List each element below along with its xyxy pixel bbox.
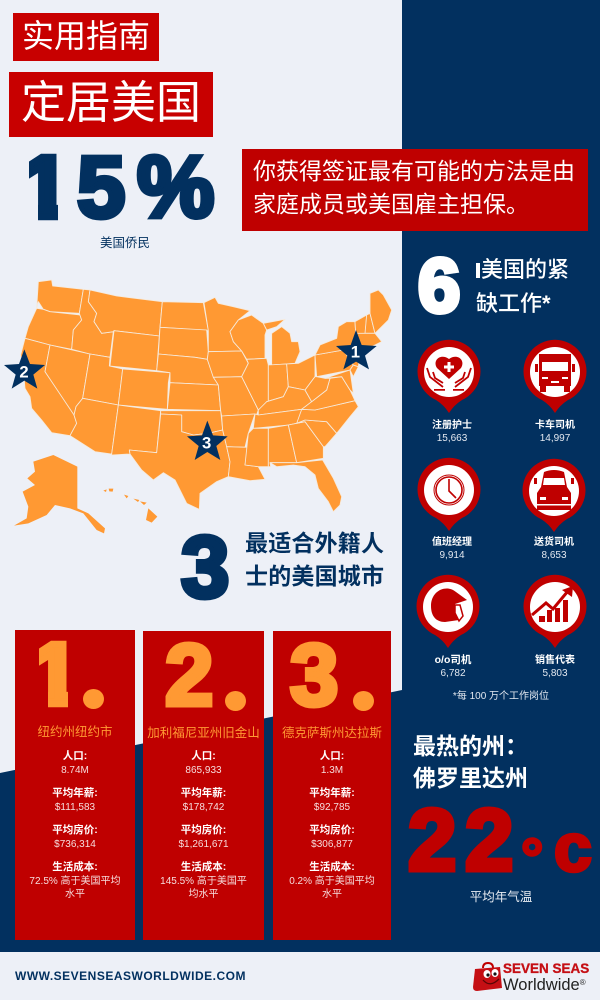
statistic: 22 degrees (408, 792, 592, 889)
label: owner operator driver: o/o司机 (435, 654, 471, 666)
city facts: 865,933 $178,742 $1,261,671 145.5% 高于美国平 (160, 764, 247, 886)
footnote: per million jobs: *每 100 万个工作岗位 (453, 691, 549, 702)
star 3: Dallas: 3 (202, 434, 211, 453)
city facts: 生活成本: (52, 861, 98, 873)
title tag: practical guide: 实用指南 (22, 18, 150, 54)
star 2: San Francisco (4, 349, 45, 389)
rank number: 3 (290, 627, 338, 724)
label: truck driver: 卡车司机 (535, 420, 575, 431)
label: owner operator driver: 6,782 (440, 668, 466, 679)
city facts: 人口: (320, 750, 344, 762)
heading: hottest state: 最热的州： (413, 733, 528, 759)
statistic: 22 degrees: ° (521, 826, 543, 889)
statistic: 15 percent: 5 (77, 139, 125, 236)
statistic: 15 percent: 1 (21, 139, 69, 236)
city facts: 平均年薪: (181, 787, 226, 799)
card: Dallas (273, 631, 391, 940)
number 6: 6 (418, 244, 460, 329)
heading: six shortage jobs (476, 257, 569, 316)
city facts: 人口: (191, 750, 216, 762)
city facts: 8.74M $111,583 $736,314 72.5% 高于美国平均 (29, 764, 121, 886)
callout: visa route: 你获得签证最有可能的方法是由 (253, 158, 575, 184)
city facts: 平均房价: (52, 824, 98, 836)
label: shift manager (432, 536, 472, 561)
city name: 德克萨斯州达拉斯 (282, 726, 382, 740)
heading: six shortage jobs: 美国的紧 (481, 257, 569, 282)
card: New York (15, 630, 135, 940)
label: registered nurse: 15,663 (437, 433, 467, 444)
city facts: 平均房价: (181, 824, 226, 836)
contiguous states (21, 280, 392, 512)
map of the United States (4, 280, 392, 534)
statistic: 15 percent: % (137, 139, 214, 236)
star 1: New York (336, 330, 377, 369)
Alaska (14, 455, 105, 533)
rank number: 2 (165, 627, 213, 724)
title tag: practical guide (13, 13, 159, 61)
label: registered nurse: 注册护士 (432, 420, 472, 431)
label: truck driver (535, 419, 575, 444)
statistic: 15 percent (29, 139, 215, 236)
title: settling in the US: 定居美国 (21, 77, 201, 128)
statistic: 22 degrees: 2 (408, 792, 456, 889)
city facts: 水平 (322, 889, 342, 900)
rank number: 1 (31, 626, 79, 723)
number 3: 3 (181, 519, 229, 616)
city name: 纽约州纽约市 (37, 725, 112, 739)
heading: hottest state (413, 733, 528, 791)
callout: visa route (242, 149, 588, 231)
label: delivery driver: 8,653 (541, 550, 567, 561)
star 1: New York: 1 (351, 343, 360, 362)
statistic: 22 degrees: c (554, 810, 592, 886)
label: shift manager: 9,914 (439, 550, 465, 561)
label: delivery driver: 送货司机 (534, 537, 574, 548)
rank dot (83, 689, 104, 709)
logo wordmark red: SEVEN SEAS (503, 961, 589, 976)
heading: hottest state: 佛罗里达州 (413, 765, 528, 791)
rank dot (225, 691, 246, 711)
logo wordmark dark: Worldwide® (503, 976, 586, 994)
city facts: 人口: (63, 750, 87, 762)
city facts: 生活成本: (181, 861, 226, 873)
pin: truck driver (524, 340, 586, 413)
pin: registered nurse (418, 340, 480, 413)
pin: shift manager (418, 458, 480, 531)
label: owner operator driver (435, 654, 472, 679)
label: registered nurse (432, 419, 472, 444)
pin: owner operator driver (416, 574, 480, 648)
statistic caption: 平均年气温 (470, 890, 532, 904)
pin: sales representative (524, 574, 586, 648)
city facts: 平均房价: (309, 824, 355, 836)
city facts: 水平 (65, 889, 85, 900)
card: San Francisco (143, 631, 264, 940)
heading: three best cities: 士的美国城市 (245, 563, 384, 589)
city facts: 平均年薪: (309, 787, 355, 799)
heading: three best cities (245, 530, 384, 589)
star 3: Dallas (187, 421, 228, 460)
city facts: 均水平 (188, 889, 218, 900)
pin: delivery driver (522, 458, 586, 532)
heading: six shortage jobs: 缺工作* (476, 291, 551, 316)
icon: suitcase (473, 962, 502, 991)
rank dot (353, 691, 374, 711)
city facts: 生活成本: (309, 861, 355, 873)
heading: three best cities: 最适合外籍人 (245, 530, 384, 556)
statistic: 22 degrees: 2 (465, 792, 513, 889)
label: shift manager: 值班经理 (432, 537, 472, 548)
label: sales representative: 5,803 (542, 668, 568, 679)
Hawaii (103, 489, 157, 523)
statistic caption: 美国侨民 (100, 236, 150, 250)
website address: WWW.SEVENSEASWORLDWIDE.COM (15, 969, 246, 983)
star 2: San Francisco: 2 (19, 362, 29, 381)
city facts: 平均年薪: (52, 787, 98, 799)
title: settling in the US (9, 72, 213, 137)
callout: visa route: 家庭成员或美国雇主担保。 (253, 191, 529, 217)
logo (473, 961, 589, 994)
label: truck driver: 14,997 (540, 433, 570, 444)
city facts: 1.3M $92,785 $306,877 0.2% 高于美国平均 (289, 764, 375, 886)
label: sales representative (535, 654, 575, 679)
label: delivery driver (534, 536, 574, 561)
label: sales representative: 销售代表 (535, 655, 575, 666)
city name: 加利福尼亚州旧金山 (147, 726, 260, 740)
